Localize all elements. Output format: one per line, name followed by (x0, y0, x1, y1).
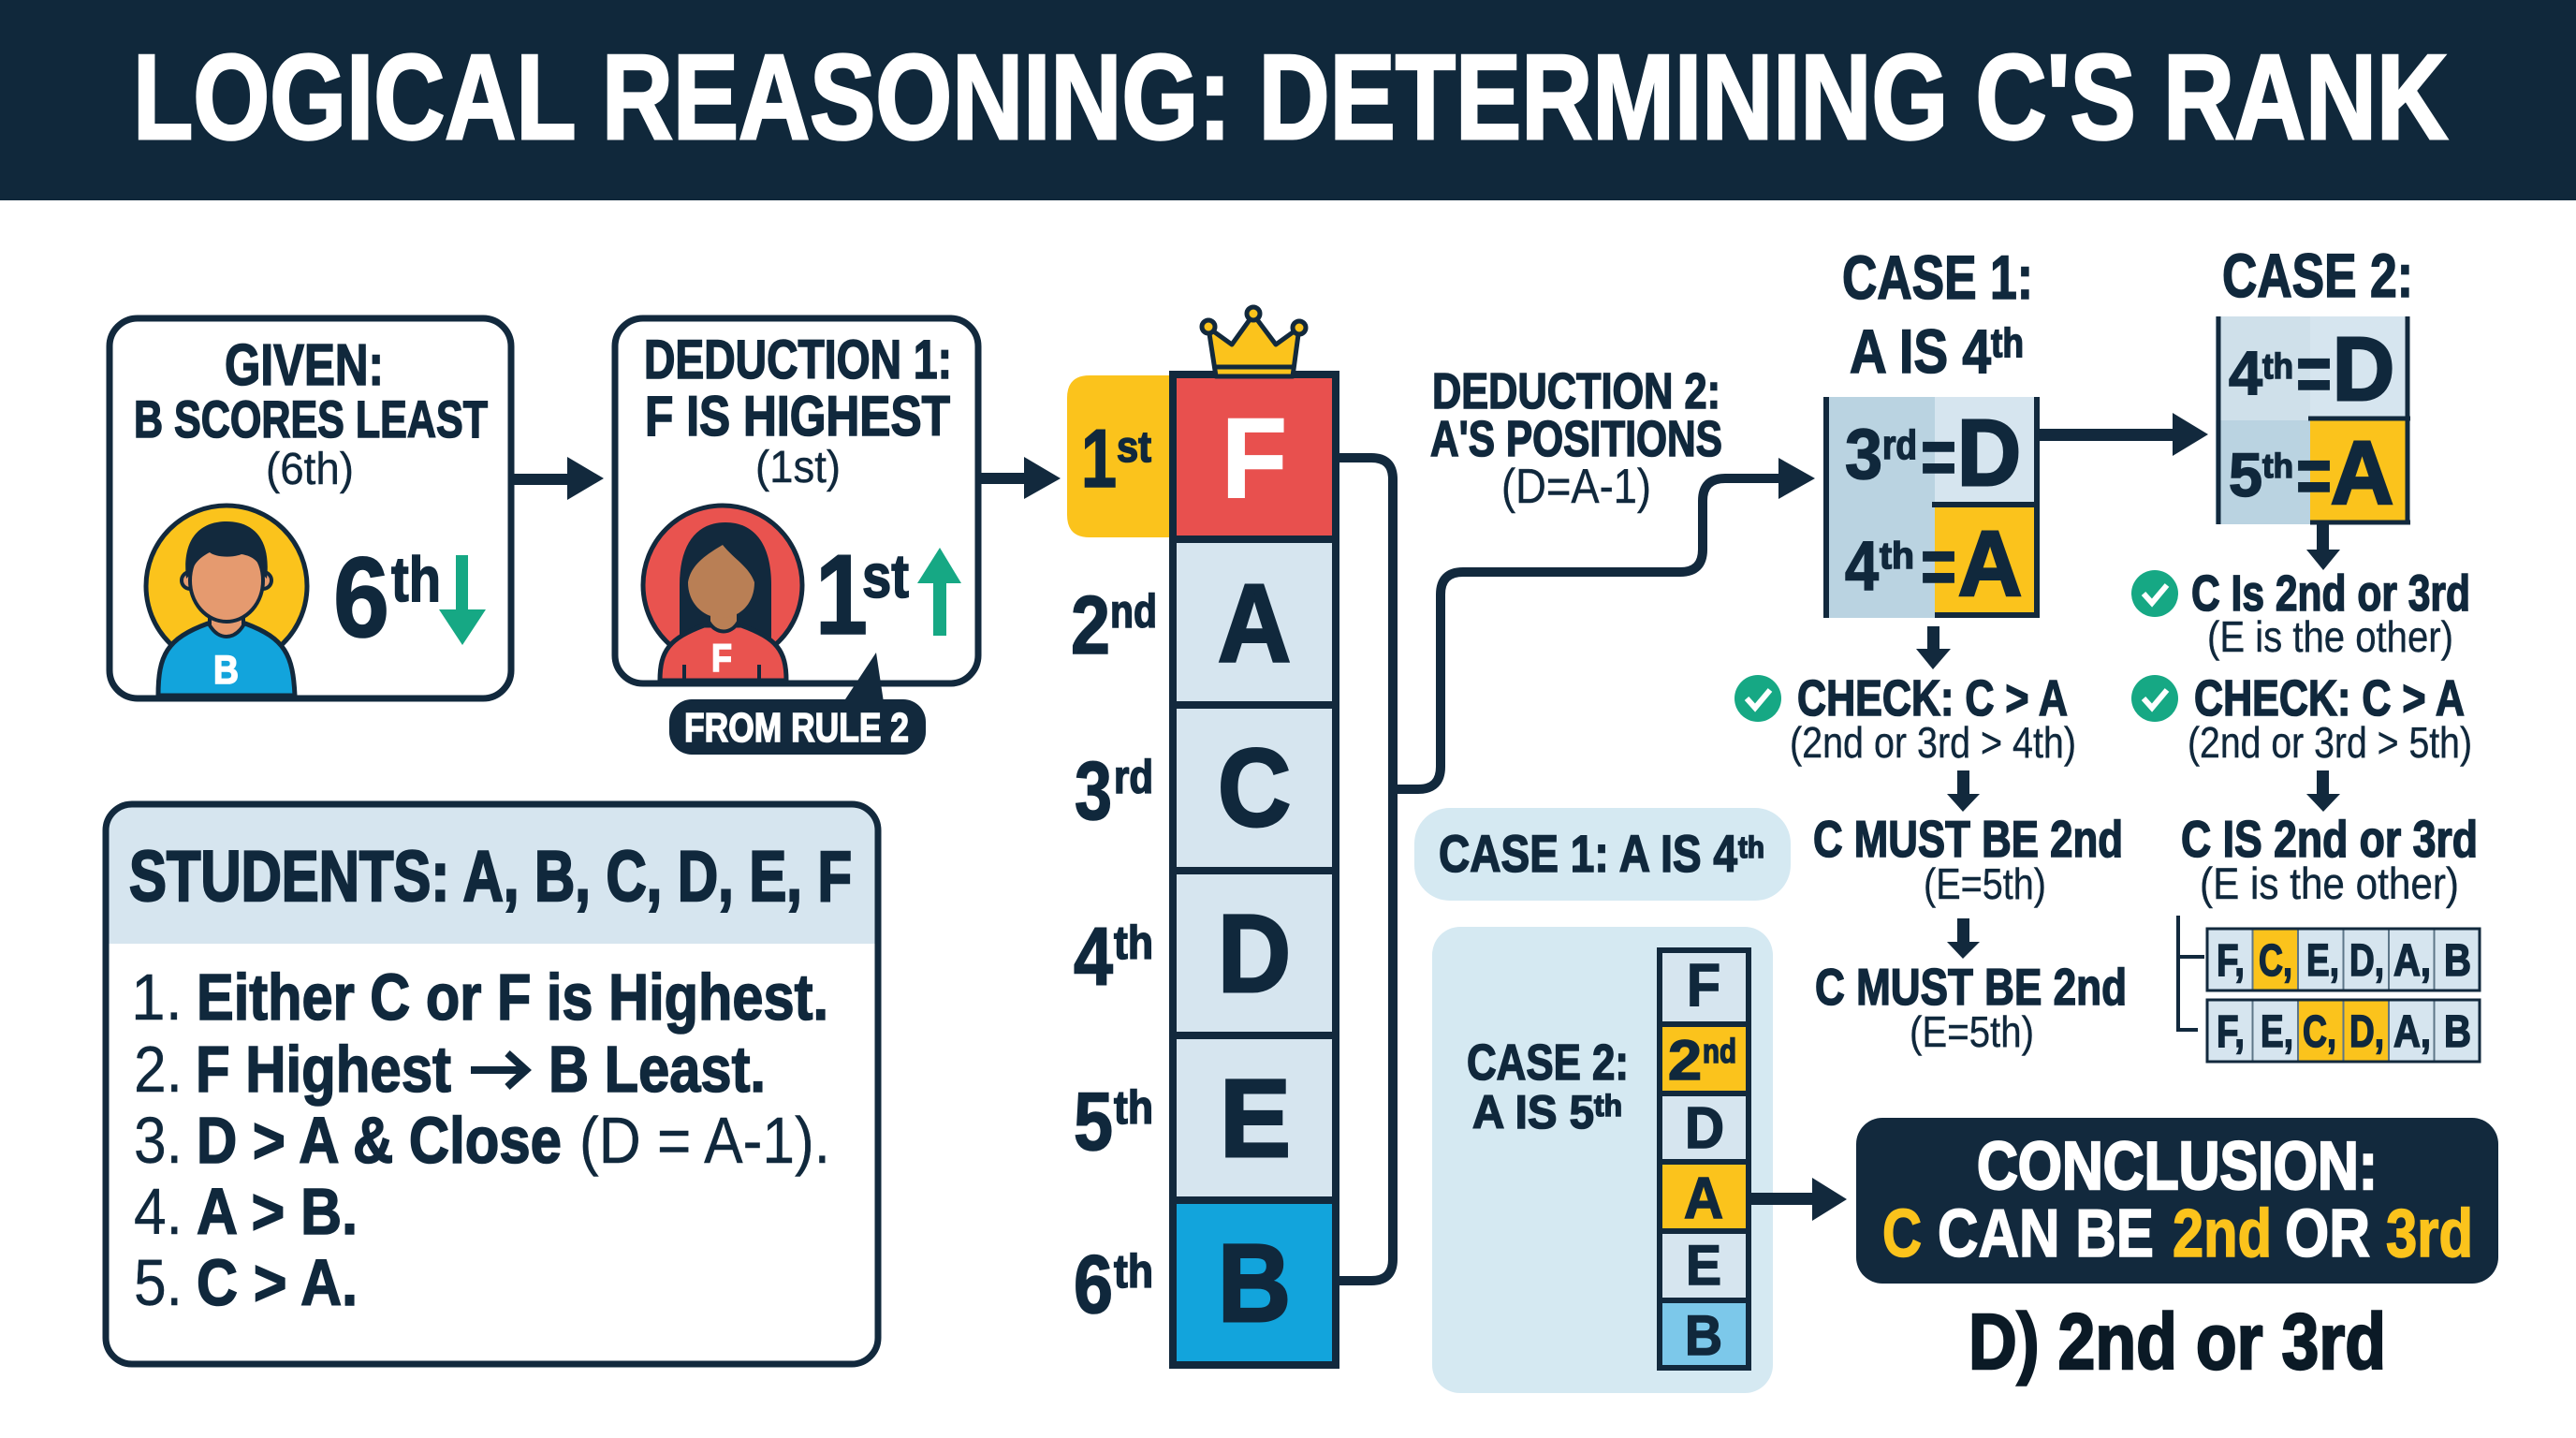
case 2 check: (2nd or 3rd > 5th) (2188, 718, 2472, 767)
icon: green down arrow (439, 555, 486, 645)
order strip 1: A, (2393, 936, 2431, 986)
case 2 box: th (2262, 447, 2293, 485)
case 2 side label (1467, 1034, 1629, 1138)
order strip 1: F, (2217, 936, 2245, 986)
rank 1st: st (862, 541, 909, 610)
case 2 side label: A IS 5 (1472, 1086, 1594, 1138)
icon: green up arrow (917, 548, 961, 636)
case 2 first result (2131, 565, 2470, 661)
case 2 check: CHECK: C > A (2194, 670, 2465, 726)
rank labels: st (1117, 422, 1151, 471)
rank labels: th (1114, 1081, 1153, 1134)
conclusion statement (1882, 1196, 2473, 1271)
deduction 2 label: A'S POSITIONS (1430, 411, 1722, 467)
mini ranking stack: E (1686, 1234, 1721, 1297)
rank labels: 5 (1074, 1075, 1113, 1167)
conclusion heading: CONCLUSION: (1977, 1129, 2378, 1204)
conclusion box (1856, 1118, 2498, 1284)
deduction 2 label: (D=A-1) (1501, 460, 1651, 514)
case 2 side label: CASE 2: (1467, 1034, 1629, 1091)
case 2 side panel (1432, 927, 1773, 1393)
rule 4: 4. (134, 1175, 183, 1248)
arrow: case 2 box down (2306, 524, 2340, 570)
ranking column (1173, 374, 1336, 1365)
case 2 box: A (2331, 423, 2393, 523)
callout: from rule 2: FROM RULE 2 (684, 705, 909, 751)
case 1 box: D (1957, 401, 2021, 506)
case 2 box: = (2296, 432, 2332, 521)
case 1 result two (1815, 958, 2127, 1056)
arrow: case 1 check down (1947, 770, 1980, 812)
rule 5 (134, 1246, 358, 1319)
rank labels: 2 (1071, 579, 1110, 671)
order strip 2: E, (2261, 1007, 2293, 1057)
case 1 box: A (1958, 512, 2022, 615)
case 1 result one (1813, 810, 2123, 908)
order strip 2: C, (2303, 1007, 2336, 1057)
order strip 1: D, (2349, 936, 2384, 986)
rule 2 (134, 1033, 766, 1106)
mini ranking stack: B (1685, 1304, 1722, 1367)
rank labels (1071, 412, 1157, 1330)
rank labels: 3 (1075, 744, 1112, 837)
case 2 first result: (E is the other) (2207, 612, 2453, 661)
case 1 box: 3 (1845, 415, 1882, 494)
students heading: STUDENTS: A, B, C, D, E, F (129, 837, 852, 917)
bracket connector (1339, 458, 1393, 1281)
icon: crown jewels (1202, 307, 1306, 334)
rule 1: 1. (131, 961, 183, 1034)
case 2 second result: (E is the other) (2200, 858, 2459, 908)
icon: student B avatar (146, 506, 307, 696)
order strip 2: D, (2349, 1007, 2384, 1057)
ranking column: B (1218, 1222, 1291, 1345)
case 1 check (1734, 670, 2076, 767)
deduction 1 heading: DEDUCTION 1: (644, 330, 952, 390)
rule 3: 3. (134, 1104, 183, 1177)
deduction 1 statement: F IS HIGHEST (645, 385, 950, 448)
case 1 check: CHECK: C > A (1797, 670, 2068, 726)
case 2 box: 5 (2229, 440, 2262, 509)
rule 3: D > A & Close (197, 1104, 562, 1177)
ranking column: D (1218, 892, 1291, 1016)
order strip 1: E, (2306, 936, 2339, 986)
rank labels: 4 (1074, 910, 1113, 1003)
panel: given (110, 318, 511, 698)
given note: (6th) (266, 445, 354, 494)
rank labels: 1 (1081, 412, 1117, 505)
rank 6th: 6 (333, 534, 389, 661)
rank 1st: 1 (815, 531, 868, 658)
case 1 heading (1842, 242, 2033, 386)
rule 4: A > B. (197, 1175, 358, 1248)
arrow: to conclusion (1751, 1178, 1847, 1221)
arrow: case 2 check down (2306, 770, 2340, 812)
icon: student B avatar: B (213, 648, 239, 693)
mini ranking stack: F (1687, 951, 1720, 1019)
ranking column: C (1218, 726, 1291, 850)
case 2 box: th (2262, 347, 2293, 387)
mini ranking stack: nd (1703, 1032, 1736, 1070)
rank 1st (815, 531, 909, 658)
callout: from rule 2 (669, 653, 926, 755)
case 1 result two: (E=5th) (1910, 1007, 2034, 1056)
case 2 box: D (2333, 319, 2394, 419)
panel: students and rules (106, 804, 878, 1364)
rule 3 (134, 1104, 830, 1177)
rule 4 (134, 1175, 358, 1248)
arrow: deduction 2 to case 1 (1395, 458, 1815, 789)
case 1 result two: C MUST BE 2nd (1815, 958, 2127, 1016)
rank 6th (333, 534, 441, 661)
case 2 second result: C IS 2nd or 3rd (2181, 810, 2478, 868)
mini ranking stack (1660, 950, 1749, 1371)
case 1 pill: CASE 1: A IS 4 (1439, 824, 1737, 883)
case 1 pill (1414, 808, 1791, 901)
case 1 result one: C MUST BE 2nd (1813, 810, 2123, 868)
yellow 1st tab (1067, 375, 1170, 537)
rank 6th: th (391, 544, 441, 615)
case 2 second result (2181, 810, 2478, 908)
case 2 box: 4 (2229, 338, 2262, 407)
case 1 box (1823, 397, 2040, 618)
case 2 box (2216, 316, 2410, 524)
order strip 2 (2207, 1000, 2480, 1062)
order strip 2: B (2444, 1007, 2471, 1057)
conclusion statement: 2nd (2173, 1196, 2272, 1271)
conclusion statement: C (1882, 1196, 1922, 1271)
mini ranking stack: D (1685, 1096, 1724, 1161)
rule 3: (D = A-1). (579, 1104, 830, 1177)
tree connector (2178, 916, 2204, 1030)
ranking column: E (1220, 1057, 1291, 1181)
rule 1: Either C or F is Highest. (197, 961, 828, 1034)
header banner (0, 0, 2576, 200)
case 1 box: 4 (1845, 527, 1879, 605)
panel: deduction 1 (615, 318, 978, 683)
rank labels: nd (1110, 585, 1157, 638)
case 1 box: rd (1882, 422, 1917, 468)
order strip 2: A, (2393, 1007, 2431, 1057)
rank labels: 6 (1074, 1238, 1113, 1330)
given heading: GIVEN: (225, 333, 384, 398)
ranking column: A (1218, 562, 1291, 685)
case 2 check (2131, 670, 2472, 767)
rule 2: 2. (134, 1033, 183, 1106)
arrow: case 1 box down (1916, 626, 1951, 669)
conclusion statement: OR (2285, 1196, 2370, 1271)
case 1 box: th (1880, 536, 1914, 577)
deduction 2 label: DEDUCTION 2: (1432, 363, 1720, 419)
case 1 heading: th (1991, 320, 2024, 366)
conclusion statement: CAN BE (1938, 1196, 2154, 1271)
deduction 1 note: (1st) (755, 443, 841, 492)
case 1 box: = (1921, 413, 1956, 502)
case 1 pill: th (1738, 830, 1764, 864)
rule 5: 5. (134, 1246, 183, 1319)
case 2 heading: CASE 2: (2222, 241, 2413, 310)
rank labels: rd (1114, 751, 1153, 803)
case 1 result one: (E=5th) (1924, 859, 2046, 908)
mini ranking stack: A (1684, 1167, 1723, 1231)
rule 2: B Least. (549, 1033, 766, 1106)
order strip 1: B (2444, 936, 2471, 986)
case 2 first result: C Is 2nd or 3rd (2191, 565, 2470, 622)
ranking column: F (1222, 394, 1287, 521)
rule 2: F Highest (196, 1033, 451, 1106)
rank labels: th (1114, 1245, 1153, 1298)
order strip 1: C, (2259, 936, 2292, 986)
arrow: deduction 1 to ranking (981, 457, 1061, 499)
case 1 heading: CASE 1: (1842, 242, 2033, 312)
case 2 side label: th (1594, 1089, 1622, 1123)
case 1 box: = (1921, 522, 1956, 611)
final answer: D) 2nd or 3rd (1969, 1298, 2386, 1386)
rule 5: C > A. (197, 1246, 358, 1319)
deduction 2 label (1430, 363, 1722, 514)
order strip 1 (2207, 929, 2480, 990)
icon: student F avatar: F (711, 636, 732, 680)
case 1 check: (2nd or 3rd > 4th) (1790, 718, 2076, 767)
arrow: case 1 result down (1947, 918, 1980, 959)
icon: crown (1208, 315, 1299, 376)
case 1 heading: A IS 4 (1850, 316, 1991, 386)
mini ranking stack: 2 (1668, 1029, 1702, 1092)
arrow: given to deduction 1 (514, 457, 604, 500)
order strip 2: F, (2217, 1007, 2245, 1057)
arrow: case 1 to case 2 (2040, 413, 2208, 456)
case 2 box: = (2296, 330, 2332, 418)
conclusion statement: 3rd (2386, 1196, 2473, 1271)
icon: student F avatar (643, 506, 802, 681)
given statement: B SCORES LEAST (134, 389, 488, 448)
rank labels: th (1114, 917, 1153, 969)
